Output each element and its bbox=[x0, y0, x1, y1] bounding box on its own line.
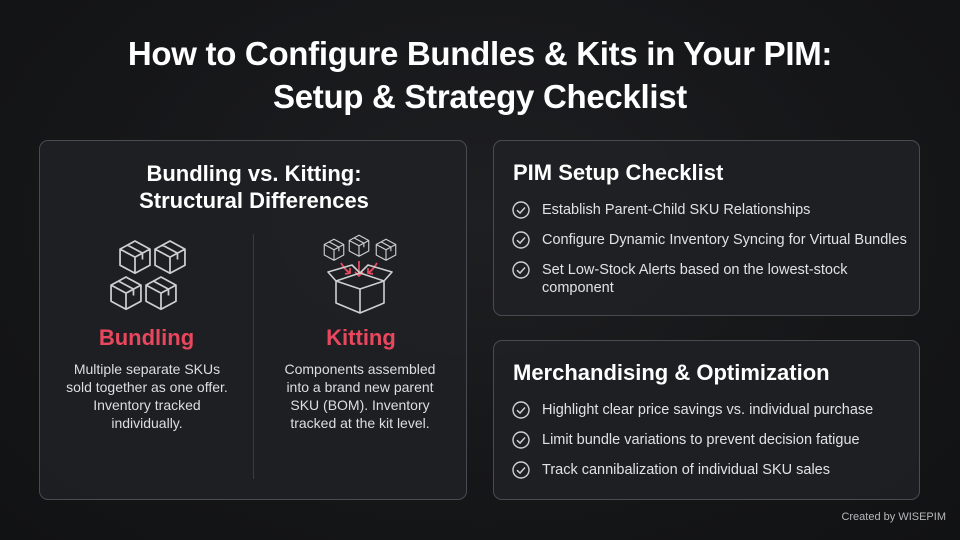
title: How to Configure Bundles & Kits in Your PIM: bbox=[128, 35, 832, 72]
panel: PIM setup checklist bbox=[493, 140, 920, 316]
item 3: Track cannibalization of individual SKU sales bbox=[542, 462, 830, 478]
label: kitting: Kitting bbox=[326, 325, 396, 350]
text: kitting description: Components assembled into a brand new parent SKU (BOM). Inventory tracked at the kit level. bbox=[284, 361, 435, 431]
panel heading: Bundling vs. Kitting: bbox=[146, 161, 362, 186]
item 1: Highlight clear price savings vs. individual purchase bbox=[542, 402, 873, 418]
heading: Merchandising & Optimization bbox=[513, 360, 830, 385]
icon: bundling boxes bbox=[110, 240, 186, 310]
heading: PIM Setup Checklist bbox=[513, 160, 723, 185]
item 2: Configure Dynamic Inventory Syncing for Virtual Bundles bbox=[542, 232, 907, 248]
divider bbox=[253, 234, 254, 479]
panel: merchandising bbox=[493, 340, 920, 500]
panel: bundling vs kitting bbox=[39, 140, 467, 500]
item 1: Establish Parent-Child SKU Relationships bbox=[542, 202, 810, 218]
label: bundling: Bundling bbox=[99, 325, 194, 350]
item 2: Limit bundle variations to prevent decision fatigue bbox=[542, 432, 860, 448]
text: bundling description: Multiple separate SKUs sold together as one offer. Inventory tracked individually. bbox=[66, 361, 228, 431]
item 3: Set Low-Stock Alerts based on the lowest-stock component bbox=[542, 262, 847, 296]
icon: kitting box bbox=[324, 234, 396, 314]
panel heading: Structural Differences bbox=[139, 188, 369, 213]
title bbox=[128, 35, 832, 115]
credit: Created by WISEPIM bbox=[841, 511, 946, 523]
title: Setup & Strategy Checklist bbox=[273, 78, 687, 115]
panel heading bbox=[139, 161, 369, 213]
